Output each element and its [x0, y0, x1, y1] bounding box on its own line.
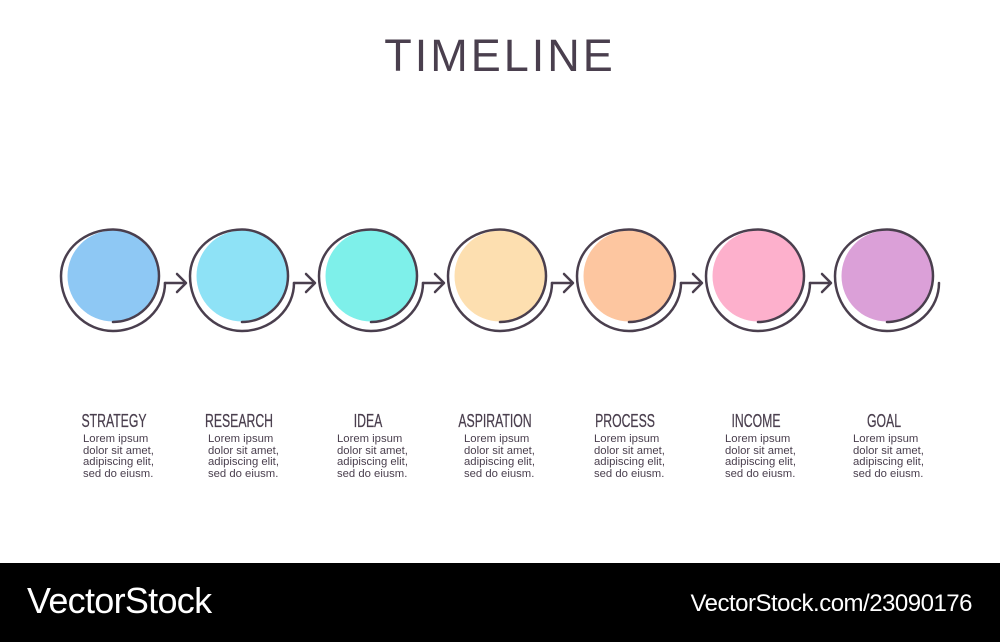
step 5 circle: [577, 230, 702, 331]
label: research: adipiscing elit,: [208, 456, 279, 468]
label: process: dolor sit amet,: [594, 445, 665, 457]
shadow line: [130, 370, 870, 372]
label: goal: dolor sit amet,: [853, 445, 924, 457]
footer logo: VectorStock: [27, 580, 211, 621]
footer url: VectorStock.com/23090176: [690, 590, 972, 617]
step 2 circle: [190, 230, 315, 331]
label: idea: Lorem ipsum: [337, 433, 402, 445]
label: goal: adipiscing elit,: [853, 456, 924, 468]
label: strategy: sed do eiusm.: [83, 468, 153, 480]
label: goal: sed do eiusm.: [853, 468, 923, 480]
label: research: sed do eiusm.: [208, 468, 278, 480]
title: TIMELINE: [384, 30, 616, 81]
step 6 circle: [706, 230, 831, 331]
label: idea: dolor sit amet,: [337, 445, 408, 457]
label: aspiration: ASPIRATION: [458, 411, 532, 431]
label: goal: Lorem ipsum: [853, 433, 918, 445]
label: goal: GOAL: [867, 411, 901, 431]
label: strategy: STRATEGY: [81, 411, 147, 431]
step 4 circle: [448, 230, 573, 331]
label: idea: adipiscing elit,: [337, 456, 408, 468]
label: income: INCOME: [732, 411, 780, 431]
label: process: PROCESS: [595, 411, 655, 431]
step 7 circle: [835, 230, 939, 331]
label: idea: [337, 411, 408, 480]
label: goal: [853, 411, 924, 480]
label: strategy: [81, 411, 154, 480]
label: research: RESEARCH: [205, 411, 273, 431]
label: process: sed do eiusm.: [594, 468, 664, 480]
label: aspiration: sed do eiusm.: [464, 468, 534, 480]
label: income: sed do eiusm.: [725, 468, 795, 480]
footer bar: [0, 563, 1000, 642]
label: research: Lorem ipsum: [208, 433, 273, 445]
label: research: dolor sit amet,: [208, 445, 279, 457]
step 3 circle: [319, 230, 444, 331]
label: idea: sed do eiusm.: [337, 468, 407, 480]
label: aspiration: Lorem ipsum: [464, 433, 529, 445]
timeline chart: [60, 228, 940, 332]
label: process: [594, 411, 665, 480]
label: research: [205, 411, 279, 480]
label: income: Lorem ipsum: [725, 433, 790, 445]
label: income: dolor sit amet,: [725, 445, 796, 457]
label: strategy: dolor sit amet,: [83, 445, 154, 457]
label: process: Lorem ipsum: [594, 433, 659, 445]
label: idea: IDEA: [354, 411, 382, 431]
label: strategy: adipiscing elit,: [83, 456, 154, 468]
label: income: adipiscing elit,: [725, 456, 796, 468]
label: aspiration: [458, 411, 535, 480]
label: income: [725, 411, 796, 480]
label: aspiration: dolor sit amet,: [464, 445, 535, 457]
label: process: adipiscing elit,: [594, 456, 665, 468]
step 1 circle: [61, 230, 186, 331]
label: aspiration: adipiscing elit,: [464, 456, 535, 468]
label: strategy: Lorem ipsum: [83, 433, 148, 445]
